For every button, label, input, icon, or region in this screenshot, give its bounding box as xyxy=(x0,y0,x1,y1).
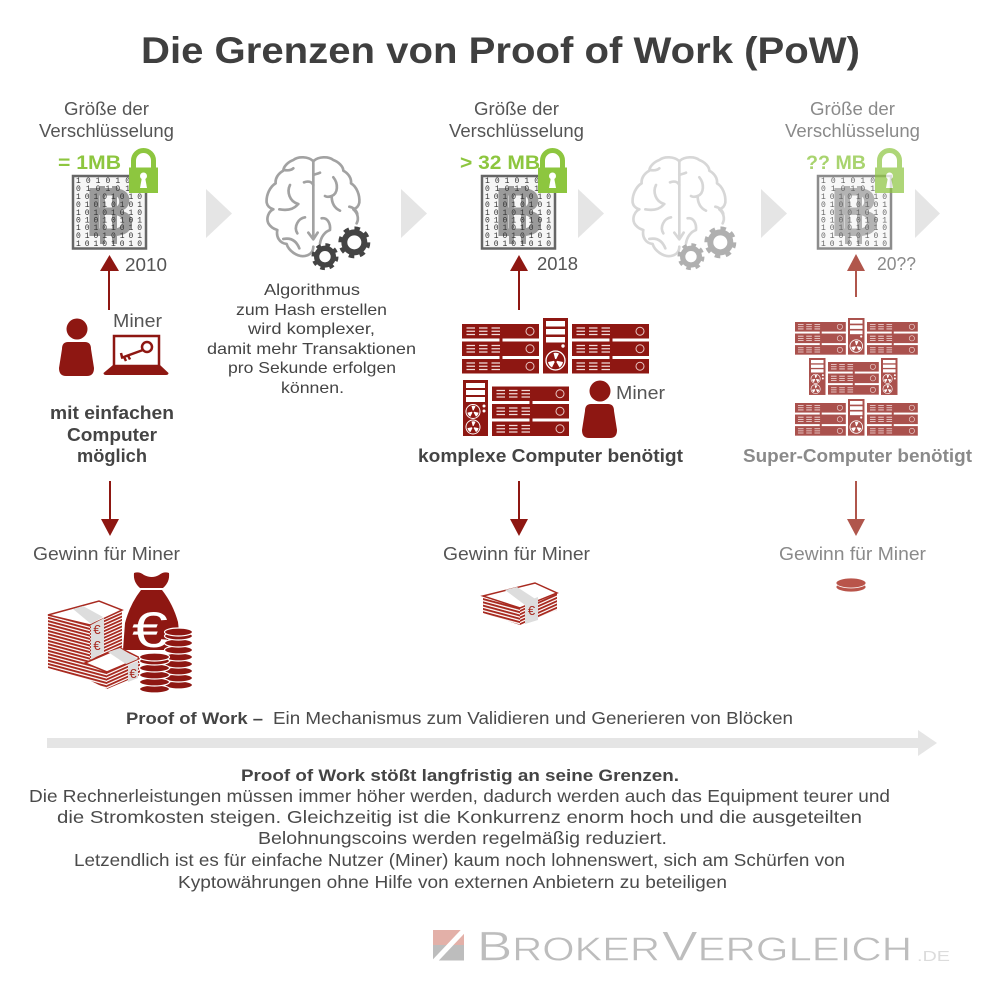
icon: money stack: € xyxy=(528,603,536,618)
text: algorithm description xyxy=(207,282,416,397)
icon: miner person xyxy=(582,380,617,438)
icon: super computer servers xyxy=(795,318,918,436)
column: 2010 xyxy=(33,99,192,693)
logo: brokervergleich: .DE xyxy=(917,948,950,965)
label: miner: Miner xyxy=(616,383,665,403)
text: algorithm description: pro Sekunde erfolgen xyxy=(228,360,396,377)
column: algorithm xyxy=(207,157,416,397)
icon: bitcoin data block xyxy=(482,173,555,251)
arrow: gray step 4 xyxy=(761,189,787,238)
label: miner: Miner xyxy=(113,311,162,331)
icon: bitcoin data block: 0 1 0 1 0 1 xyxy=(76,185,130,194)
text: algorithm description: können. xyxy=(281,380,344,397)
icon: bitcoin data block: 1 0 1 0 1 0 1 0 xyxy=(76,224,142,233)
icon: bitcoin data block: 1 0 1 0 1 0 xyxy=(821,177,875,186)
definition: proof of work: Proof of Work – xyxy=(126,709,263,728)
icon: brain with gears xyxy=(267,157,368,268)
arrow: down to profit xyxy=(847,481,865,536)
logo: brokervergleich xyxy=(433,922,950,970)
title: Die Grenzen von Proof of Work (PoW) xyxy=(141,30,860,71)
label: profit: Gewinn für Miner xyxy=(779,544,926,564)
icon: bitcoin data block: 0 1 0 1 0 1 xyxy=(485,185,539,194)
icon: laptop with key xyxy=(104,336,168,375)
icon: money pile: € xyxy=(93,622,101,637)
icon: bitcoin data block: 1 0 1 0 1 0 1 0 xyxy=(485,240,551,249)
year 2018: 2018 xyxy=(537,254,578,274)
arrow: down to profit xyxy=(510,481,528,536)
text: conclusion: Belohnungscoins werden regelmäßig reduziert. xyxy=(258,828,667,848)
icon: bitcoin data block: 0 1 0 1 0 1 0 1 xyxy=(485,232,551,241)
text: conclusion: Letzendlich ist es für einfache Nutzer (Miner) kaum noch lohnenswert, sich am Schürfen von xyxy=(74,850,845,870)
icon: bitcoin data block: 1 0 1 0 1 0 1 0 xyxy=(485,193,551,202)
icon: bitcoin data block: 0 1 0 1 0 1 0 1 xyxy=(821,232,887,241)
icon: bitcoin data block xyxy=(73,173,146,251)
arrow: servers to block xyxy=(510,255,528,310)
icon: bitcoin data block: 1 0 1 0 1 0 1 0 xyxy=(76,193,142,202)
year unknown: 20?? xyxy=(877,254,916,274)
heading: size of encryption: Verschlüsselung xyxy=(785,121,920,141)
heading: size of encryption xyxy=(39,99,174,141)
label: simple computers xyxy=(50,403,174,466)
label: simple computers: Computer xyxy=(67,425,157,445)
column: future xyxy=(743,99,972,592)
label: simple computers: möglich xyxy=(77,446,147,466)
icon: money pile: € xyxy=(93,638,101,653)
arrow: down to profit xyxy=(101,481,119,536)
icon: bitcoin data block: B xyxy=(85,173,135,251)
text: algorithm description: Algorithmus xyxy=(264,282,360,299)
heading: size of encryption: Größe der xyxy=(810,99,895,119)
icon: bitcoin data block: 1 0 1 0 1 0 1 0 xyxy=(821,193,887,202)
arrow: miner to block xyxy=(100,255,119,310)
icon: money pile: € xyxy=(132,602,168,658)
icon: faded green lock xyxy=(875,151,904,193)
heading: size of encryption: Verschlüsselung xyxy=(449,121,584,141)
icon: bitcoin data block: B xyxy=(830,173,880,251)
icon: faded brain with gears xyxy=(633,157,734,268)
label: simple computers: mit einfachen xyxy=(50,403,174,423)
heading: size of encryption xyxy=(449,99,584,141)
column: 2018 xyxy=(418,99,683,625)
label: super computers: Super-Computer benötigt xyxy=(743,446,972,466)
icon: miner person xyxy=(59,318,94,376)
icon: bitcoin data block: 1 0 1 0 1 0 1 0 xyxy=(821,209,887,218)
definition: proof of work: Ein Mechanismus zum Validieren und Generieren von Blöcken xyxy=(273,708,793,728)
arrow: gray step 5 xyxy=(915,189,940,238)
icon: bitcoin data block: 0 1 0 1 0 1 0 1 xyxy=(76,201,142,210)
heading: size of encryption: Verschlüsselung xyxy=(39,121,174,141)
logo: brokervergleich: BROKER xyxy=(477,922,660,970)
icon: bitcoin data block: 0 1 0 1 0 1 xyxy=(821,185,875,194)
icon: server group xyxy=(462,318,649,436)
icon: bitcoin data block: 1 0 1 0 1 0 1 0 xyxy=(485,209,551,218)
icon: bitcoin data block: 1 0 1 0 1 0 1 0 xyxy=(76,240,142,249)
heading: size of encryption xyxy=(785,99,920,141)
arrow: timeline xyxy=(47,730,937,756)
logo: brokervergleich: VERGLEICH xyxy=(662,922,912,970)
heading: size of encryption: Größe der xyxy=(474,99,559,119)
arrow: gray step 2 xyxy=(401,189,427,238)
text: conclusion: Proof of Work stößt langfristig an seine Grenzen. xyxy=(241,766,679,785)
icon: green lock xyxy=(538,151,567,193)
text: algorithm description: zum Hash erstellen xyxy=(236,302,387,319)
heading: size of encryption: Größe der xyxy=(64,99,149,119)
icon: single coin xyxy=(836,578,866,592)
icon: bitcoin data block xyxy=(818,173,891,251)
icon: bitcoin data block: B xyxy=(494,173,544,251)
arrow: servers to block xyxy=(847,254,865,297)
label: complex computers: komplexe Computer benötigt xyxy=(418,446,683,466)
text: conclusion: Die Rechnerleistungen müssen immer höher werden, dadurch werden auch das Equipment teurer und xyxy=(29,786,890,806)
icon: bitcoin data block: 0 1 0 1 0 1 0 1 xyxy=(76,232,142,241)
text: algorithm description: wird komplexer, xyxy=(247,321,375,338)
icon: bitcoin data block: 0 1 0 1 0 1 0 1 xyxy=(76,216,142,226)
label: 1MB: = 1MB xyxy=(58,153,121,174)
icon: bitcoin data block: 1 0 1 0 1 0 1 0 xyxy=(821,224,887,233)
icon: bitcoin data block: 1 0 1 0 1 0 xyxy=(485,177,539,186)
text: conclusion: Kyptowährungen ohne Hilfe von externen Anbietern zu beteiligen xyxy=(178,872,727,892)
arrow: gray step 3 xyxy=(578,189,604,238)
label: profit: Gewinn für Miner xyxy=(443,544,590,564)
icon: bitcoin data block: 1 0 1 0 1 0 1 0 xyxy=(485,224,551,233)
icon: money pile xyxy=(48,572,192,693)
icon: bitcoin data block: 0 1 0 1 0 1 0 1 xyxy=(485,201,551,210)
icon: bitcoin data block: 0 1 0 1 0 1 0 1 xyxy=(821,201,887,210)
label: unknown MB: ?? MB xyxy=(806,153,866,174)
icon: green lock xyxy=(129,151,158,193)
icon: bitcoin data block: 0 1 0 1 0 1 0 1 xyxy=(821,216,887,226)
icon: bitcoin data block: 1 0 1 0 1 0 1 0 xyxy=(821,240,887,249)
arrow: gray step 1 xyxy=(206,189,232,238)
text: conclusion: die Stromkosten steigen. Gleichzeitig ist die Konkurrenz enorm hoch und die ausgeteilten xyxy=(57,807,862,827)
text: algorithm description: damit mehr Transaktionen xyxy=(207,341,416,358)
icon: bitcoin data block: 0 1 0 1 0 1 0 1 xyxy=(485,216,551,226)
text: conclusion xyxy=(29,766,890,892)
icon: money stack xyxy=(483,583,557,625)
label: profit: Gewinn für Miner xyxy=(33,544,180,564)
icon: bitcoin data block: 1 0 1 0 1 0 1 0 xyxy=(76,209,142,218)
label: 32 MB: > 32 MB xyxy=(460,153,540,174)
icon: money pile: € xyxy=(129,666,137,681)
icon: bitcoin data block: 1 0 1 0 1 0 xyxy=(76,177,130,186)
year 2010: 2010 xyxy=(125,255,167,275)
